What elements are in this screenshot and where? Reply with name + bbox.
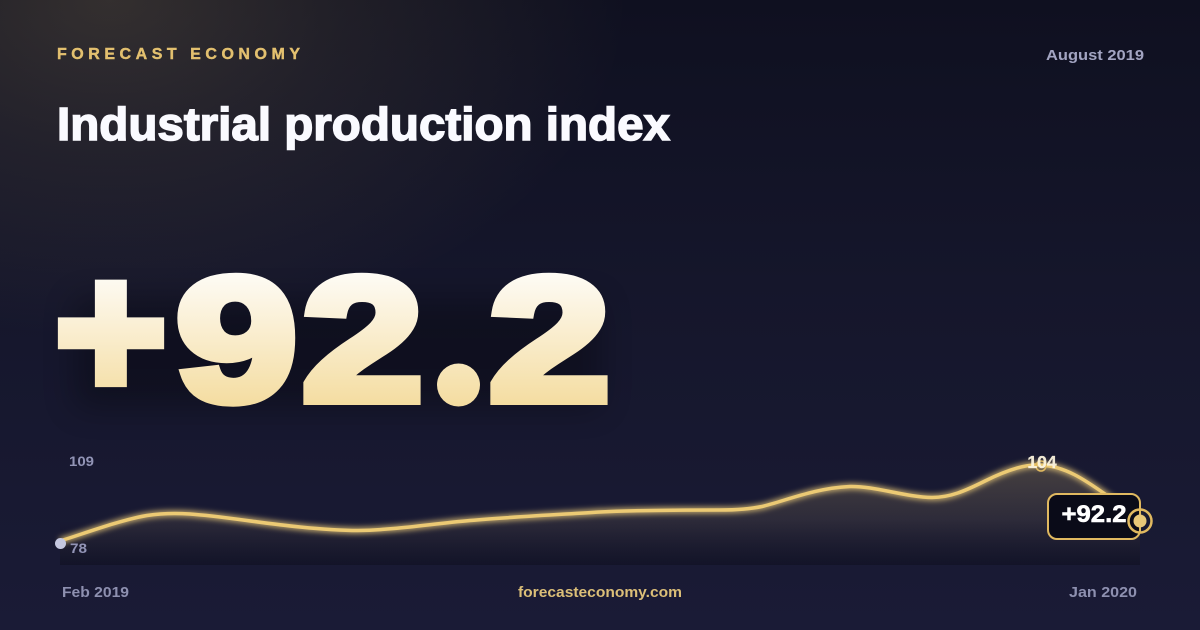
headline value: +: [55, 226, 166, 438]
axis minimum label: 78: [70, 540, 87, 556]
axis maximum label: 109: [69, 453, 94, 469]
headline value: .: [440, 295, 478, 417]
start date label: Feb 2019: [62, 584, 129, 601]
date label: August 2019: [1046, 47, 1144, 64]
title: Industrial production index: [57, 98, 670, 150]
start point marker: [55, 538, 66, 549]
line: [60, 465, 1140, 541]
headline value: 2: [302, 241, 423, 437]
peak value label: 104: [1027, 452, 1057, 472]
end value tag: [1048, 494, 1140, 539]
brand label: FORECAST ECONOMY: [57, 46, 300, 63]
line chart: [60, 465, 1140, 565]
end date label: Jan 2020: [1069, 584, 1137, 601]
end point marker: [1128, 510, 1152, 532]
headline value: 9: [176, 241, 297, 437]
website label: forecasteconomy.com: [518, 584, 682, 601]
end value tag: +92.2: [1062, 501, 1126, 528]
headline value: 2: [489, 241, 610, 437]
peak marker: [1036, 461, 1046, 471]
headline value: [55, 226, 610, 438]
line glow: [60, 465, 1140, 541]
chart area fill: [60, 465, 1140, 565]
